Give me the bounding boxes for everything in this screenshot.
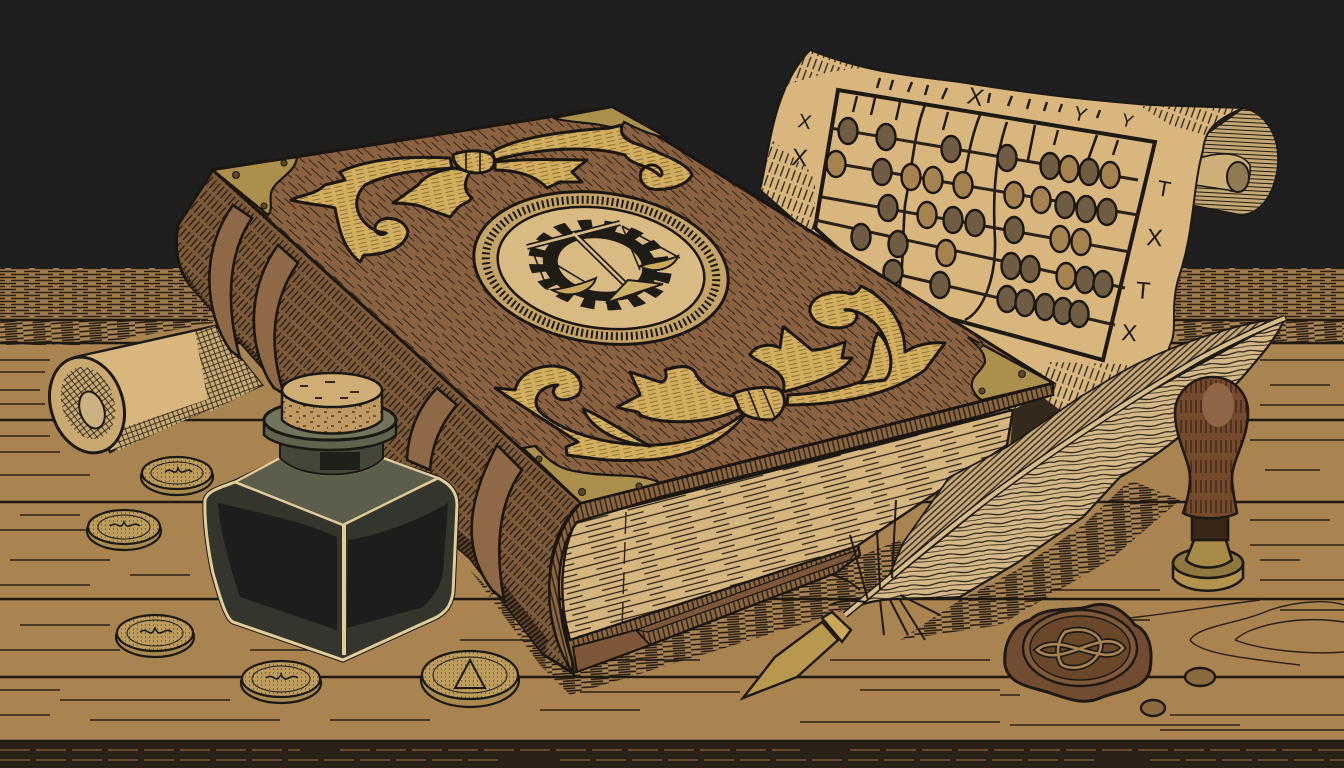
- ink bottle: [205, 373, 457, 660]
- wax stamp: [1173, 377, 1248, 591]
- nib ferrule: [822, 612, 851, 642]
- left rolled scroll: [38, 326, 262, 463]
- abacus dividers: [893, 105, 1097, 320]
- wooden table: [0, 268, 1344, 768]
- scroll with abacus: [760, 50, 1278, 420]
- tally marks and letters: T: [1155, 175, 1173, 202]
- ink panes: [218, 503, 337, 630]
- top cover: [213, 107, 1053, 503]
- loose barbs: [830, 500, 940, 640]
- wax seal: [1005, 604, 1151, 701]
- tally marks and letters: X: [1121, 319, 1138, 346]
- tally marks and letters: T: [1134, 277, 1152, 305]
- tally marks and letters: [790, 78, 1173, 346]
- tally marks and letters: X: [1145, 224, 1164, 252]
- tally marks and letters: X: [965, 82, 986, 112]
- medallion: [464, 176, 738, 360]
- book: [176, 107, 1060, 673]
- abacus frame: [815, 90, 1155, 360]
- quill feather: [743, 318, 1285, 698]
- wax drops: [1141, 668, 1215, 716]
- coin 5: [421, 651, 519, 707]
- tally marks and letters: X: [790, 144, 809, 172]
- nib: [743, 622, 838, 698]
- lower cover: [562, 540, 860, 673]
- emblem: gear and scales: [527, 217, 680, 313]
- page block: [562, 410, 1013, 640]
- coins: [87, 457, 519, 707]
- lower ornament: [495, 286, 945, 461]
- brass corners: [213, 107, 1053, 503]
- coin 3: [116, 615, 194, 657]
- upper vane: [885, 318, 1285, 585]
- cork: [282, 390, 382, 434]
- spine bands: [209, 205, 522, 600]
- tally marks and letters: Y: [1119, 110, 1136, 132]
- abacus rods: [815, 128, 1138, 325]
- shadow under book: [470, 540, 920, 695]
- coin 1: [141, 457, 213, 495]
- lower vane: [860, 318, 1285, 605]
- dark background wall: [0, 0, 1344, 270]
- scroll roll: [1190, 108, 1278, 215]
- book spine: [176, 170, 581, 673]
- bottle shoulder: [235, 458, 438, 525]
- upper ornament: [291, 125, 692, 262]
- coin 4: [241, 661, 321, 703]
- cover edge: [549, 383, 1053, 673]
- tally marks and letters: X: [796, 110, 813, 134]
- shaft: [845, 318, 1285, 615]
- tally marks and letters: Y: [1071, 103, 1089, 127]
- abacus beads: [826, 118, 1120, 327]
- parchment sheet: [760, 50, 1243, 420]
- coin 2: [87, 510, 161, 550]
